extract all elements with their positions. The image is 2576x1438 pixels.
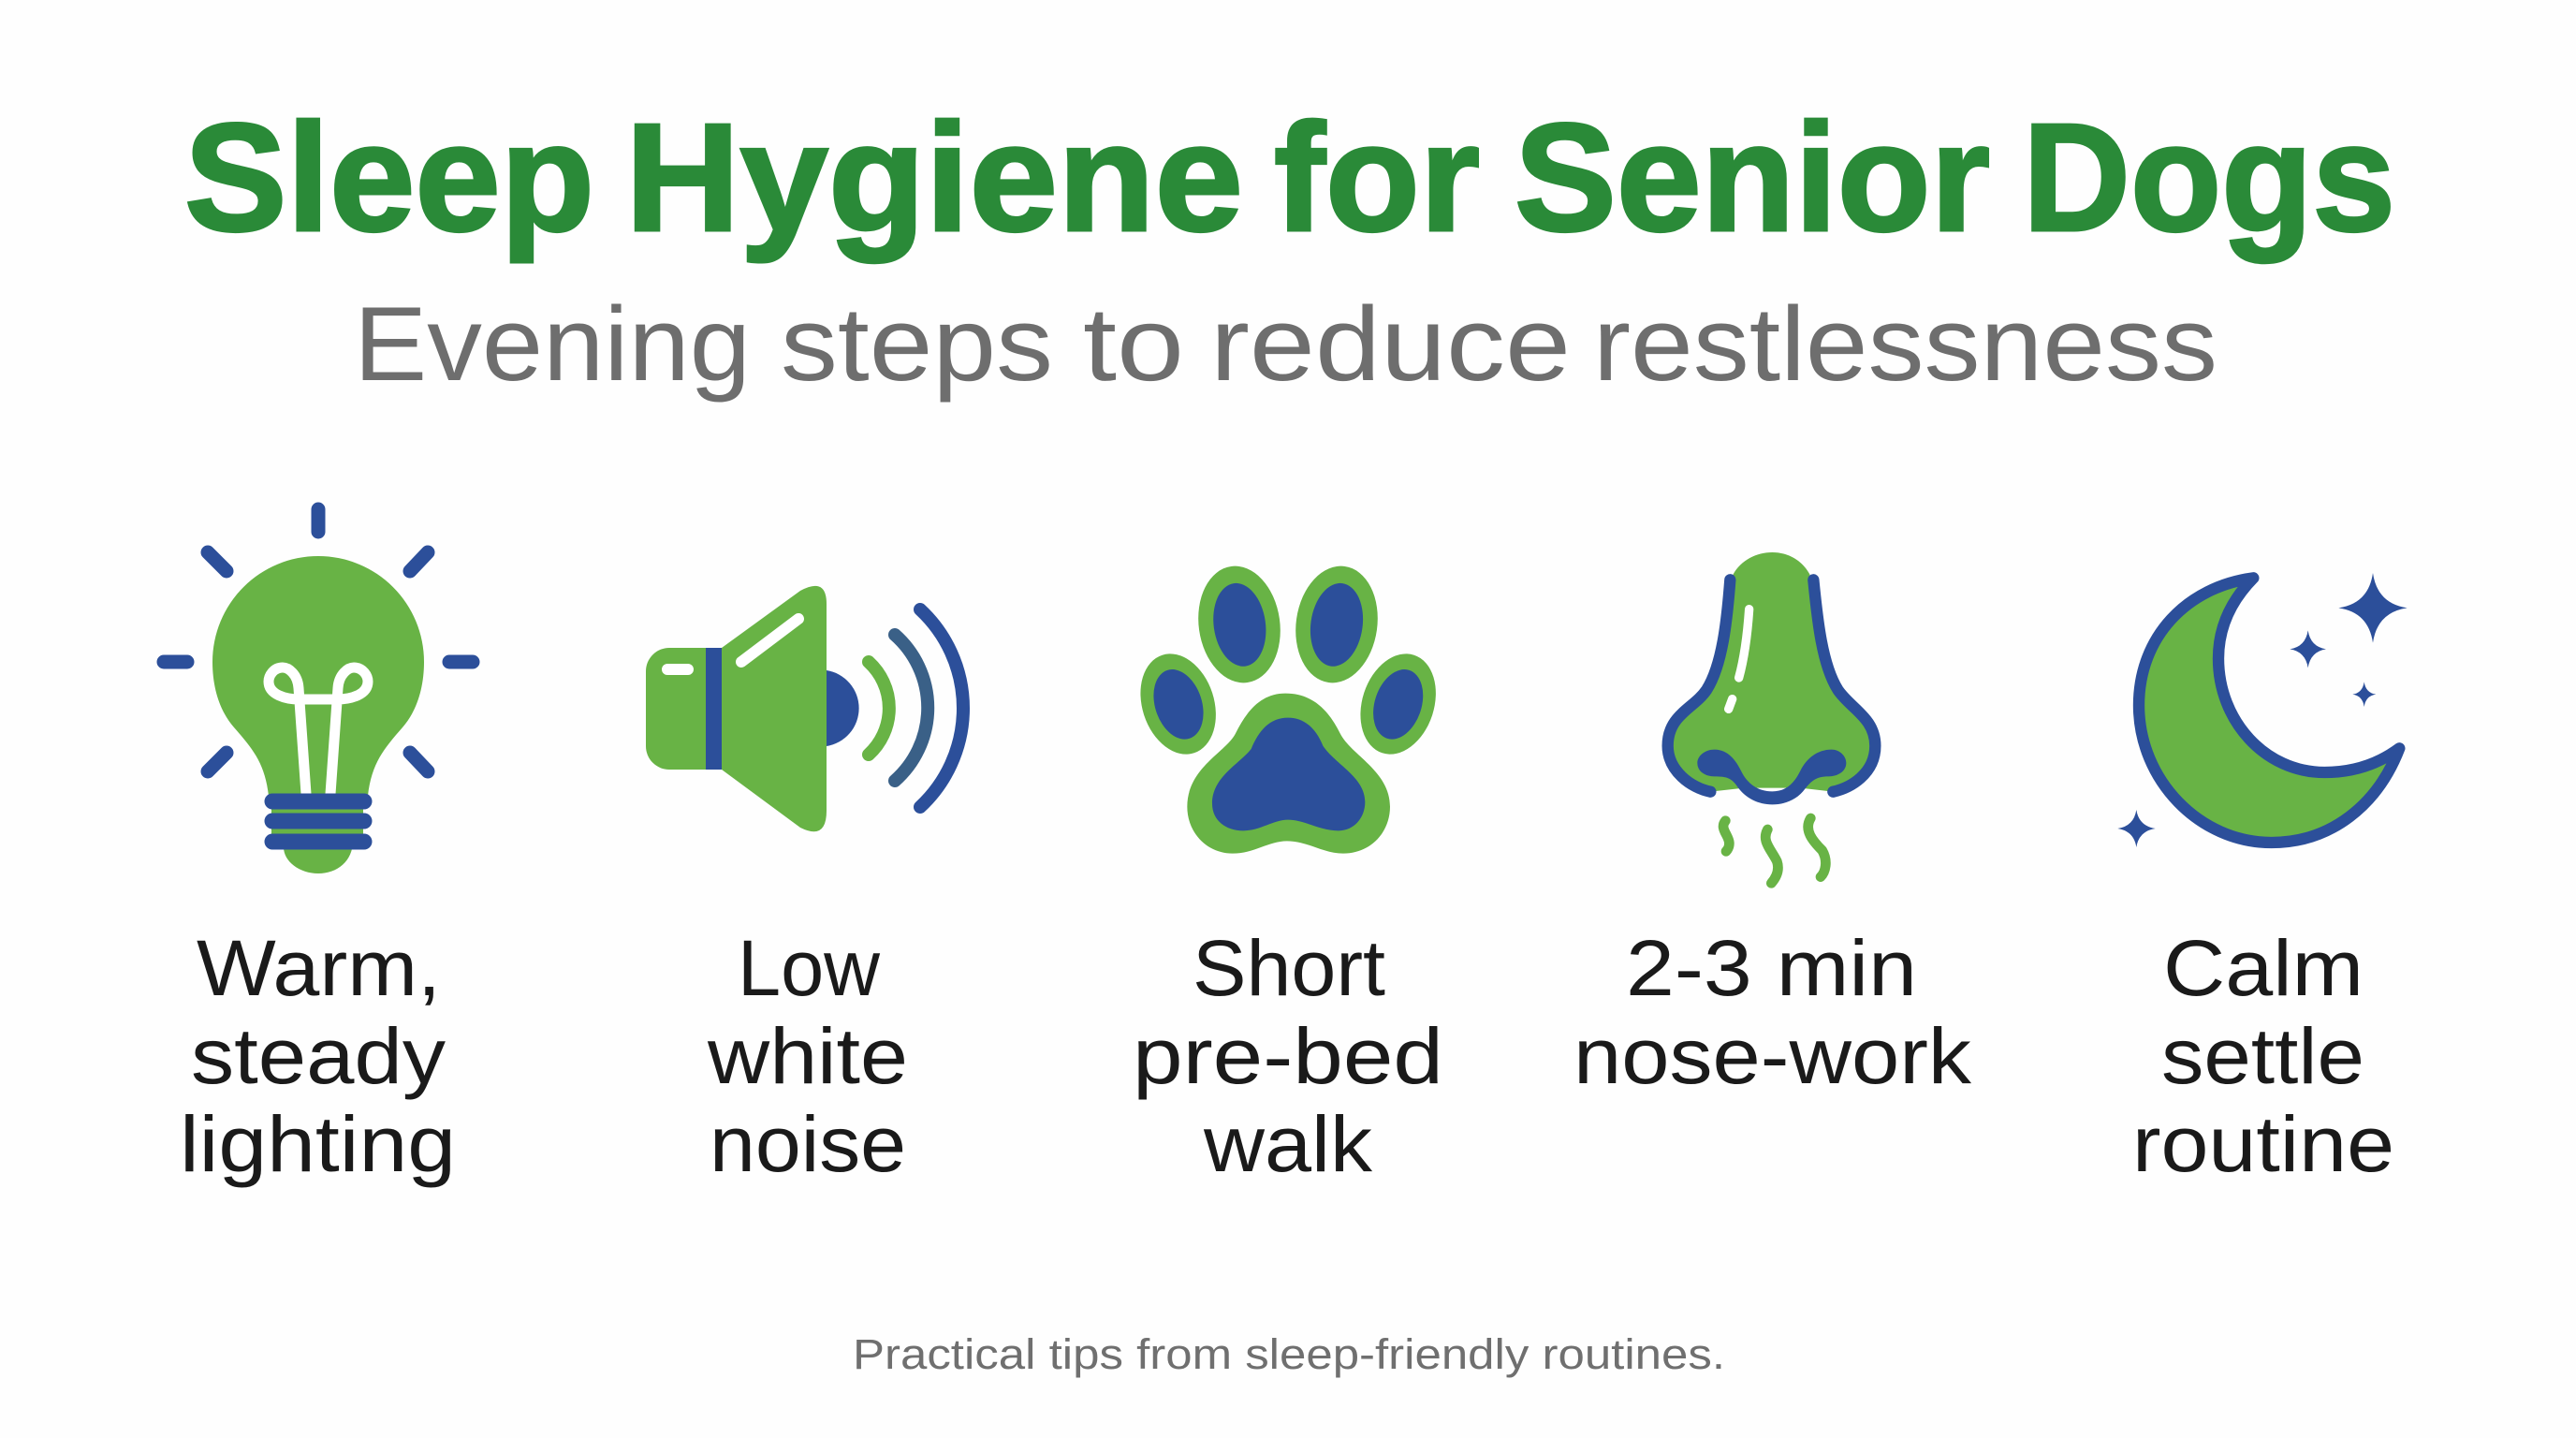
label: calm settle routine: Calm [2163,924,2364,1012]
label: 2-3 min nose-work: 2-3 min [1626,924,1917,1012]
icon: dog nose with scent [1668,552,1875,883]
label: warm, steady lighting [180,924,456,1188]
label: calm settle routine: routine [2132,1100,2394,1188]
label: 2-3 min nose-work [1573,924,1972,1100]
title: Sleep [184,92,594,263]
label: warm, steady lighting: lighting [180,1100,456,1188]
title: for [1274,92,1480,263]
label: short pre-bed walk: Short [1193,924,1385,1012]
label: short pre-bed walk: walk [1203,1100,1373,1188]
subtitle: to [1083,286,1184,403]
label: short pre-bed walk: pre-bed [1133,1012,1443,1100]
subtitle: reduce [1210,286,1571,403]
label: calm settle routine: settle [2161,1012,2364,1100]
label: low white noise: noise [710,1100,906,1188]
icon: speaker [646,586,963,831]
title [184,92,2395,263]
label: warm, steady lighting: Warm, [197,924,441,1012]
title: Senior [1515,92,1990,263]
label: 2-3 min nose-work: nose-work [1573,1012,1972,1100]
subtitle [354,286,2217,403]
icon: crescent moon and stars [2117,573,2408,847]
label: low white noise [707,924,908,1188]
label: calm settle routine [2132,924,2394,1188]
subtitle: Evening [354,286,751,403]
icon: light bulb [164,509,473,873]
subtitle: steps [781,286,1053,403]
label: low white noise: white [707,1012,908,1100]
footer note: Practical tips from sleep-friendly routines. [853,1330,1725,1378]
title: Hygiene [625,92,1243,263]
label: short pre-bed walk [1133,924,1443,1188]
subtitle: restlessness [1593,286,2217,403]
label: warm, steady lighting: steady [191,1012,446,1100]
title: Dogs [2023,92,2395,263]
icon: paw print [1128,561,1448,854]
label: low white noise: Low [738,924,880,1012]
